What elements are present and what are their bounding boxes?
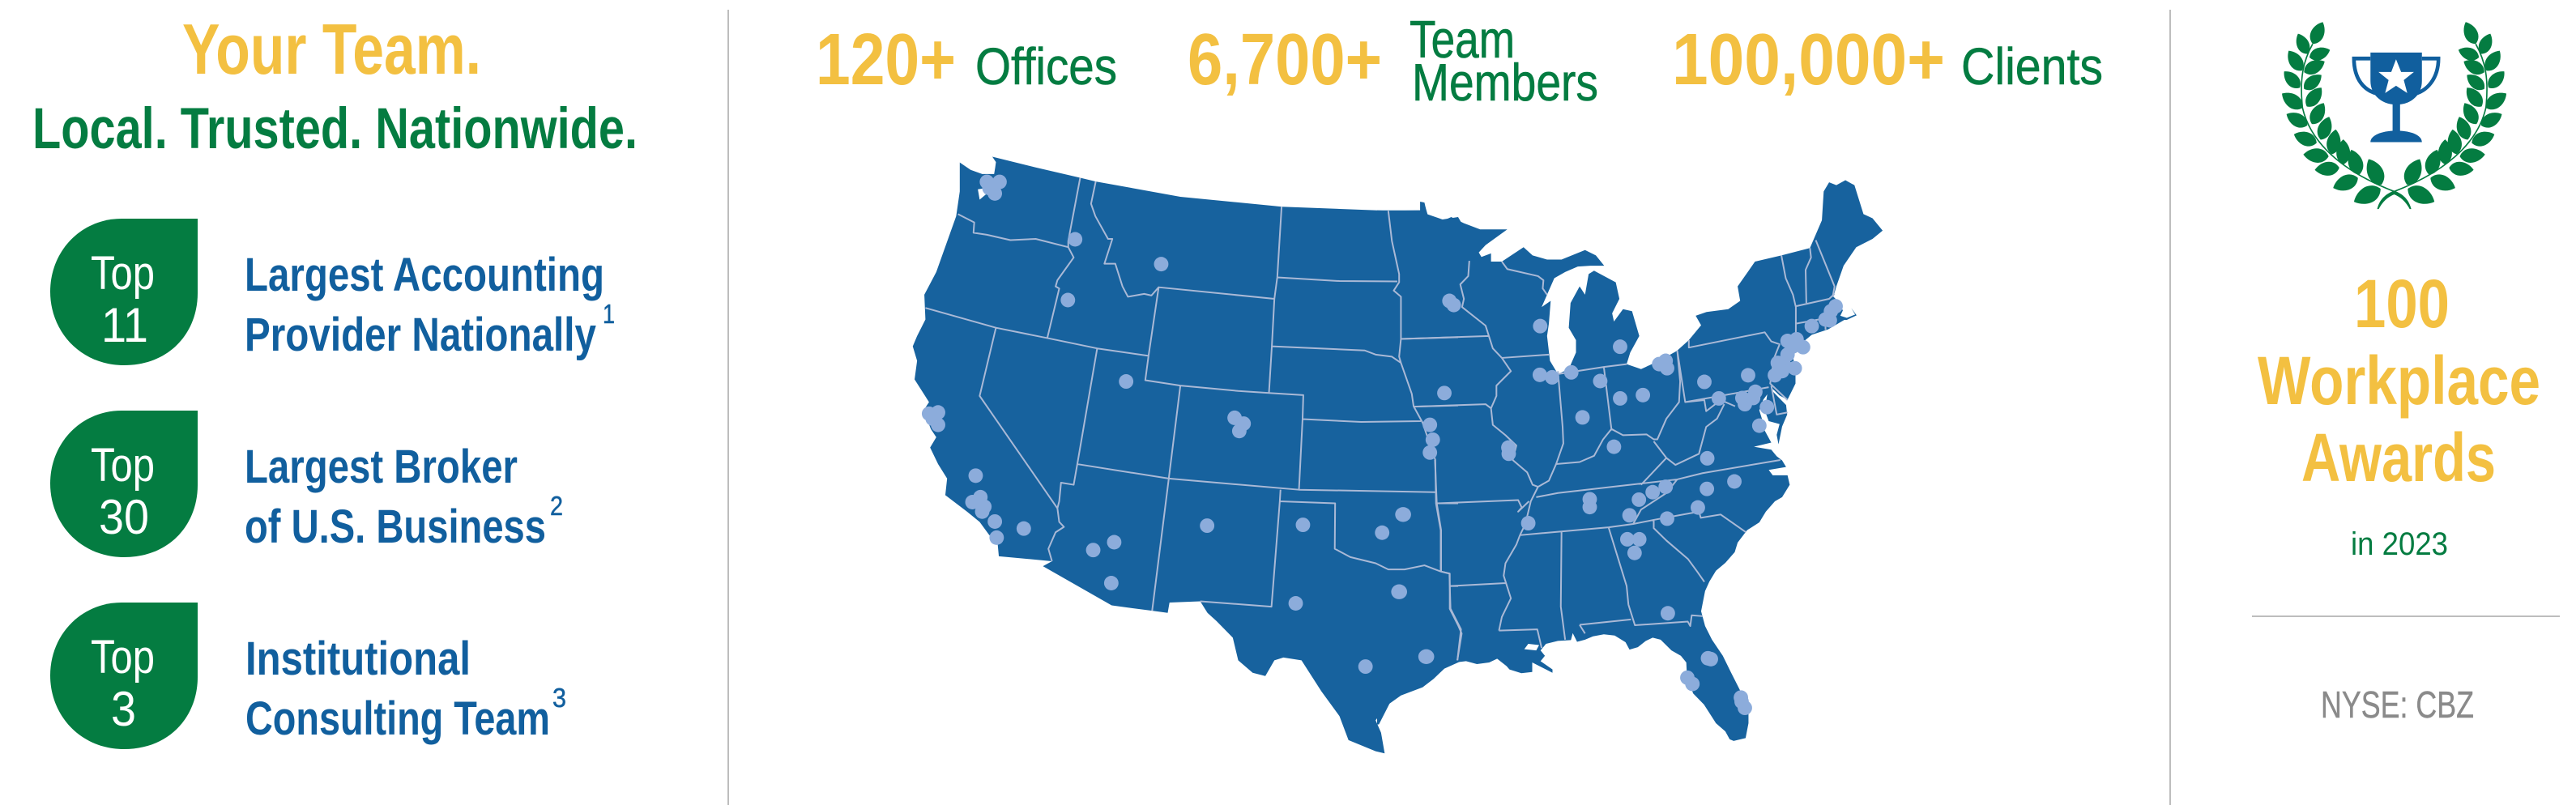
label: largest broker: Largest Broker — [245, 441, 518, 493]
label: largest accounting provider: Provider Nationally — [245, 309, 596, 361]
label: institutional consulting team: Consulting Team — [245, 692, 550, 745]
label: institutional consulting team: Institutional — [245, 632, 471, 685]
icon: trophy with laurel wreath — [2278, 19, 2510, 209]
text: 100 workplace awards — [2258, 266, 2540, 496]
label: largest broker: 2 — [550, 491, 563, 521]
map landmass: contiguous states — [913, 156, 1883, 753]
stat: clients: Clients — [1961, 37, 2103, 96]
subheading: Local. Trusted. Nationwide.: Local. Trusted. Nationwide. — [32, 97, 638, 161]
icon: trophy — [2354, 53, 2438, 142]
panel: headline statistics — [816, 10, 2103, 112]
map dots: office locations — [922, 175, 1843, 715]
label: largest accounting provider: Largest Accounting — [245, 249, 604, 301]
stat: team members: 6,700+ — [1188, 19, 1382, 100]
badge: top 3: Top — [91, 631, 155, 684]
badge: top 30: Top — [91, 439, 155, 492]
label: institutional consulting team — [245, 632, 566, 745]
icon: laurel left — [2278, 19, 2412, 209]
text: NYSE ticker: NYSE: CBZ — [2321, 684, 2474, 726]
badge: top 11 — [50, 219, 198, 365]
stat: team members — [1188, 10, 1598, 112]
stat: offices: Offices — [975, 37, 1117, 96]
badge: top 30: 30 — [99, 490, 149, 544]
map borders: state lines — [925, 177, 1835, 660]
panel: awards — [2252, 19, 2560, 726]
label: largest accounting provider: 1 — [603, 299, 615, 329]
stat: team members: Team — [1410, 10, 1515, 69]
label: institutional consulting team: 3 — [552, 683, 566, 713]
text: 100 workplace awards: 100 — [2354, 266, 2450, 342]
panel: team rankings — [32, 9, 638, 749]
label: largest accounting provider — [245, 249, 615, 361]
text: in 2023: in 2023 — [2351, 526, 2448, 562]
badge: top 11: 11 — [101, 298, 148, 352]
badge: top 30 — [50, 411, 198, 557]
heading: Your Team: Your Team. — [182, 9, 481, 89]
icon: laurel right — [2378, 19, 2510, 209]
stat: offices — [816, 19, 1117, 100]
label: largest broker — [245, 441, 563, 553]
ranking: top 11 accounting — [50, 219, 615, 365]
badge: top 3 — [50, 603, 198, 749]
map: United States office locations — [913, 156, 1883, 753]
ranking: top 30 broker — [50, 411, 563, 557]
badge: top 3: 3 — [111, 682, 136, 736]
ranking: top 3 institutional — [50, 603, 566, 749]
badge: top 11: Top — [91, 247, 155, 300]
stat: team members: Members — [1412, 53, 1598, 112]
text: 100 workplace awards: Awards — [2301, 420, 2496, 496]
label: largest broker: of U.S. Business — [245, 500, 546, 553]
stat: clients: 100,000+ — [1672, 19, 1945, 100]
stat: offices: 120+ — [816, 19, 956, 100]
